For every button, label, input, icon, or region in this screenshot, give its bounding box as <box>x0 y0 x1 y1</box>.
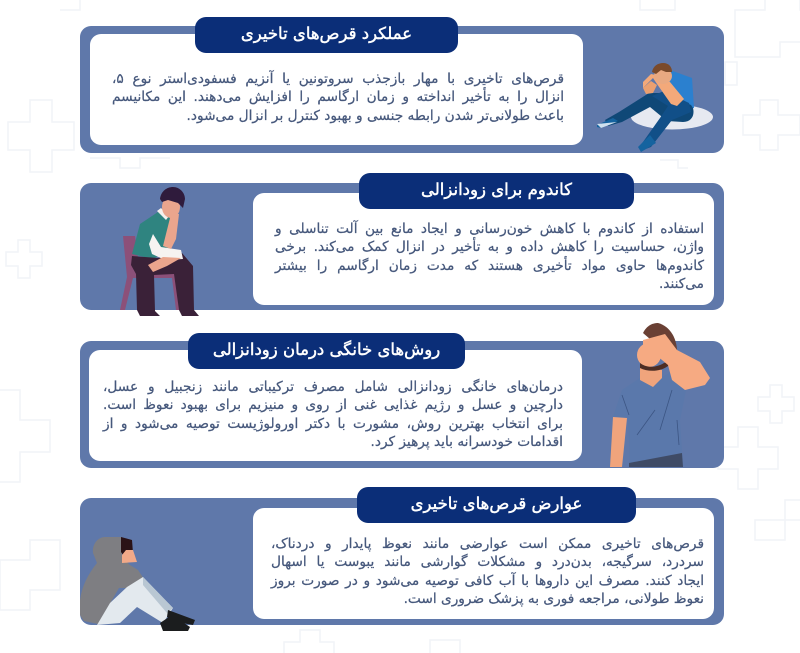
panel: condoms for premature ejaculation <box>80 183 724 310</box>
text block: condoms for premature ejaculation: می‌کنند. <box>659 276 704 292</box>
heading: side effects <box>357 487 636 523</box>
text block: side effects: سردرد، سرگیجه، بدن‌درد و مشکلات گوارشی مانند یبوست یا اسهال <box>271 554 704 570</box>
text block: condoms for premature ejaculation: کاندوم‌ها حاوی مواد تأخیری هستند که مدت زمان ارگاسم را بیشتر <box>275 258 704 274</box>
heading: how delay pills work: عملکرد قرص‌های تاخیری <box>241 24 412 43</box>
text block: side effects: نعوظ طولانی، مراجعه فوری به پزشک ضروری است. <box>404 591 704 607</box>
white text box <box>253 508 714 619</box>
heading: condoms for premature ejaculation: کاندوم برای زودانزالی <box>421 180 572 199</box>
text block: how delay pills work: باعث طولانی‌تر شدن رابطه جنسی و بهبود کنترل بر انزال می‌شود. <box>187 108 564 124</box>
text block: condoms for premature ejaculation <box>274 220 704 292</box>
heading: condoms for premature ejaculation <box>359 173 634 209</box>
text block: how delay pills work <box>112 70 564 124</box>
text block: how delay pills work: قرص‌های تاخیری با مهار بازجذب سروتونین یا آنزیم فسفودی‌استر نوع ۵، <box>112 71 564 87</box>
panel: home remedies <box>80 341 724 468</box>
white text box <box>89 350 582 461</box>
text block: home remedies: برای انتخاب بهترین روش، مشورت با دکتر اورولوژیست توصیه می‌شود و از <box>103 416 563 432</box>
heading: home remedies: روش‌های خانگی درمان زودانزالی <box>213 340 440 359</box>
heading: how delay pills work <box>195 17 458 53</box>
text block: home remedies <box>102 378 563 450</box>
heading: home remedies <box>188 333 465 369</box>
heading: side effects: عوارض قرص‌های تاخیری <box>411 494 582 513</box>
text block: how delay pills work: انزال را به تأخیر انداخته و زمان ارگاسم را افزایش می‌دهند. این مکانیسم <box>112 89 564 105</box>
text block: home remedies: دارچین و عسل و رژیم غذایی غنی از روی و منیزیم برای بهبود نعوظ است. <box>103 397 563 413</box>
text block: condoms for premature ejaculation: واژن، حساسیت را کاهش داده و به تأخیر در انزال کمک می‌کند. برخی <box>275 239 704 255</box>
text block: side effects <box>270 536 704 607</box>
text block: side effects: قرص‌های تاخیری ممکن است عوارضی مانند نعوظ پایدار و دردناک، <box>271 536 704 552</box>
text block: side effects: ایجاد کنند. مصرف این داروها با آب کافی توصیه می‌شود و در صورت بروز <box>271 573 704 589</box>
white text box <box>90 34 583 145</box>
text block: condoms for premature ejaculation: استفاده از کاندوم با کاهش خون‌رسانی و ایجاد مانع بین آلت تناسلی و <box>275 221 704 237</box>
panel: how delay pills work <box>80 26 724 153</box>
panel: side effects <box>80 498 724 625</box>
white text box <box>253 193 714 305</box>
text block: home remedies: درمان‌های خانگی زودانزالی شامل مصرف ترکیباتی مانند زنجبیل و عسل، <box>103 379 563 395</box>
text block: home remedies: اقدامات خودسرانه باید پرهیز کرد. <box>371 434 563 450</box>
